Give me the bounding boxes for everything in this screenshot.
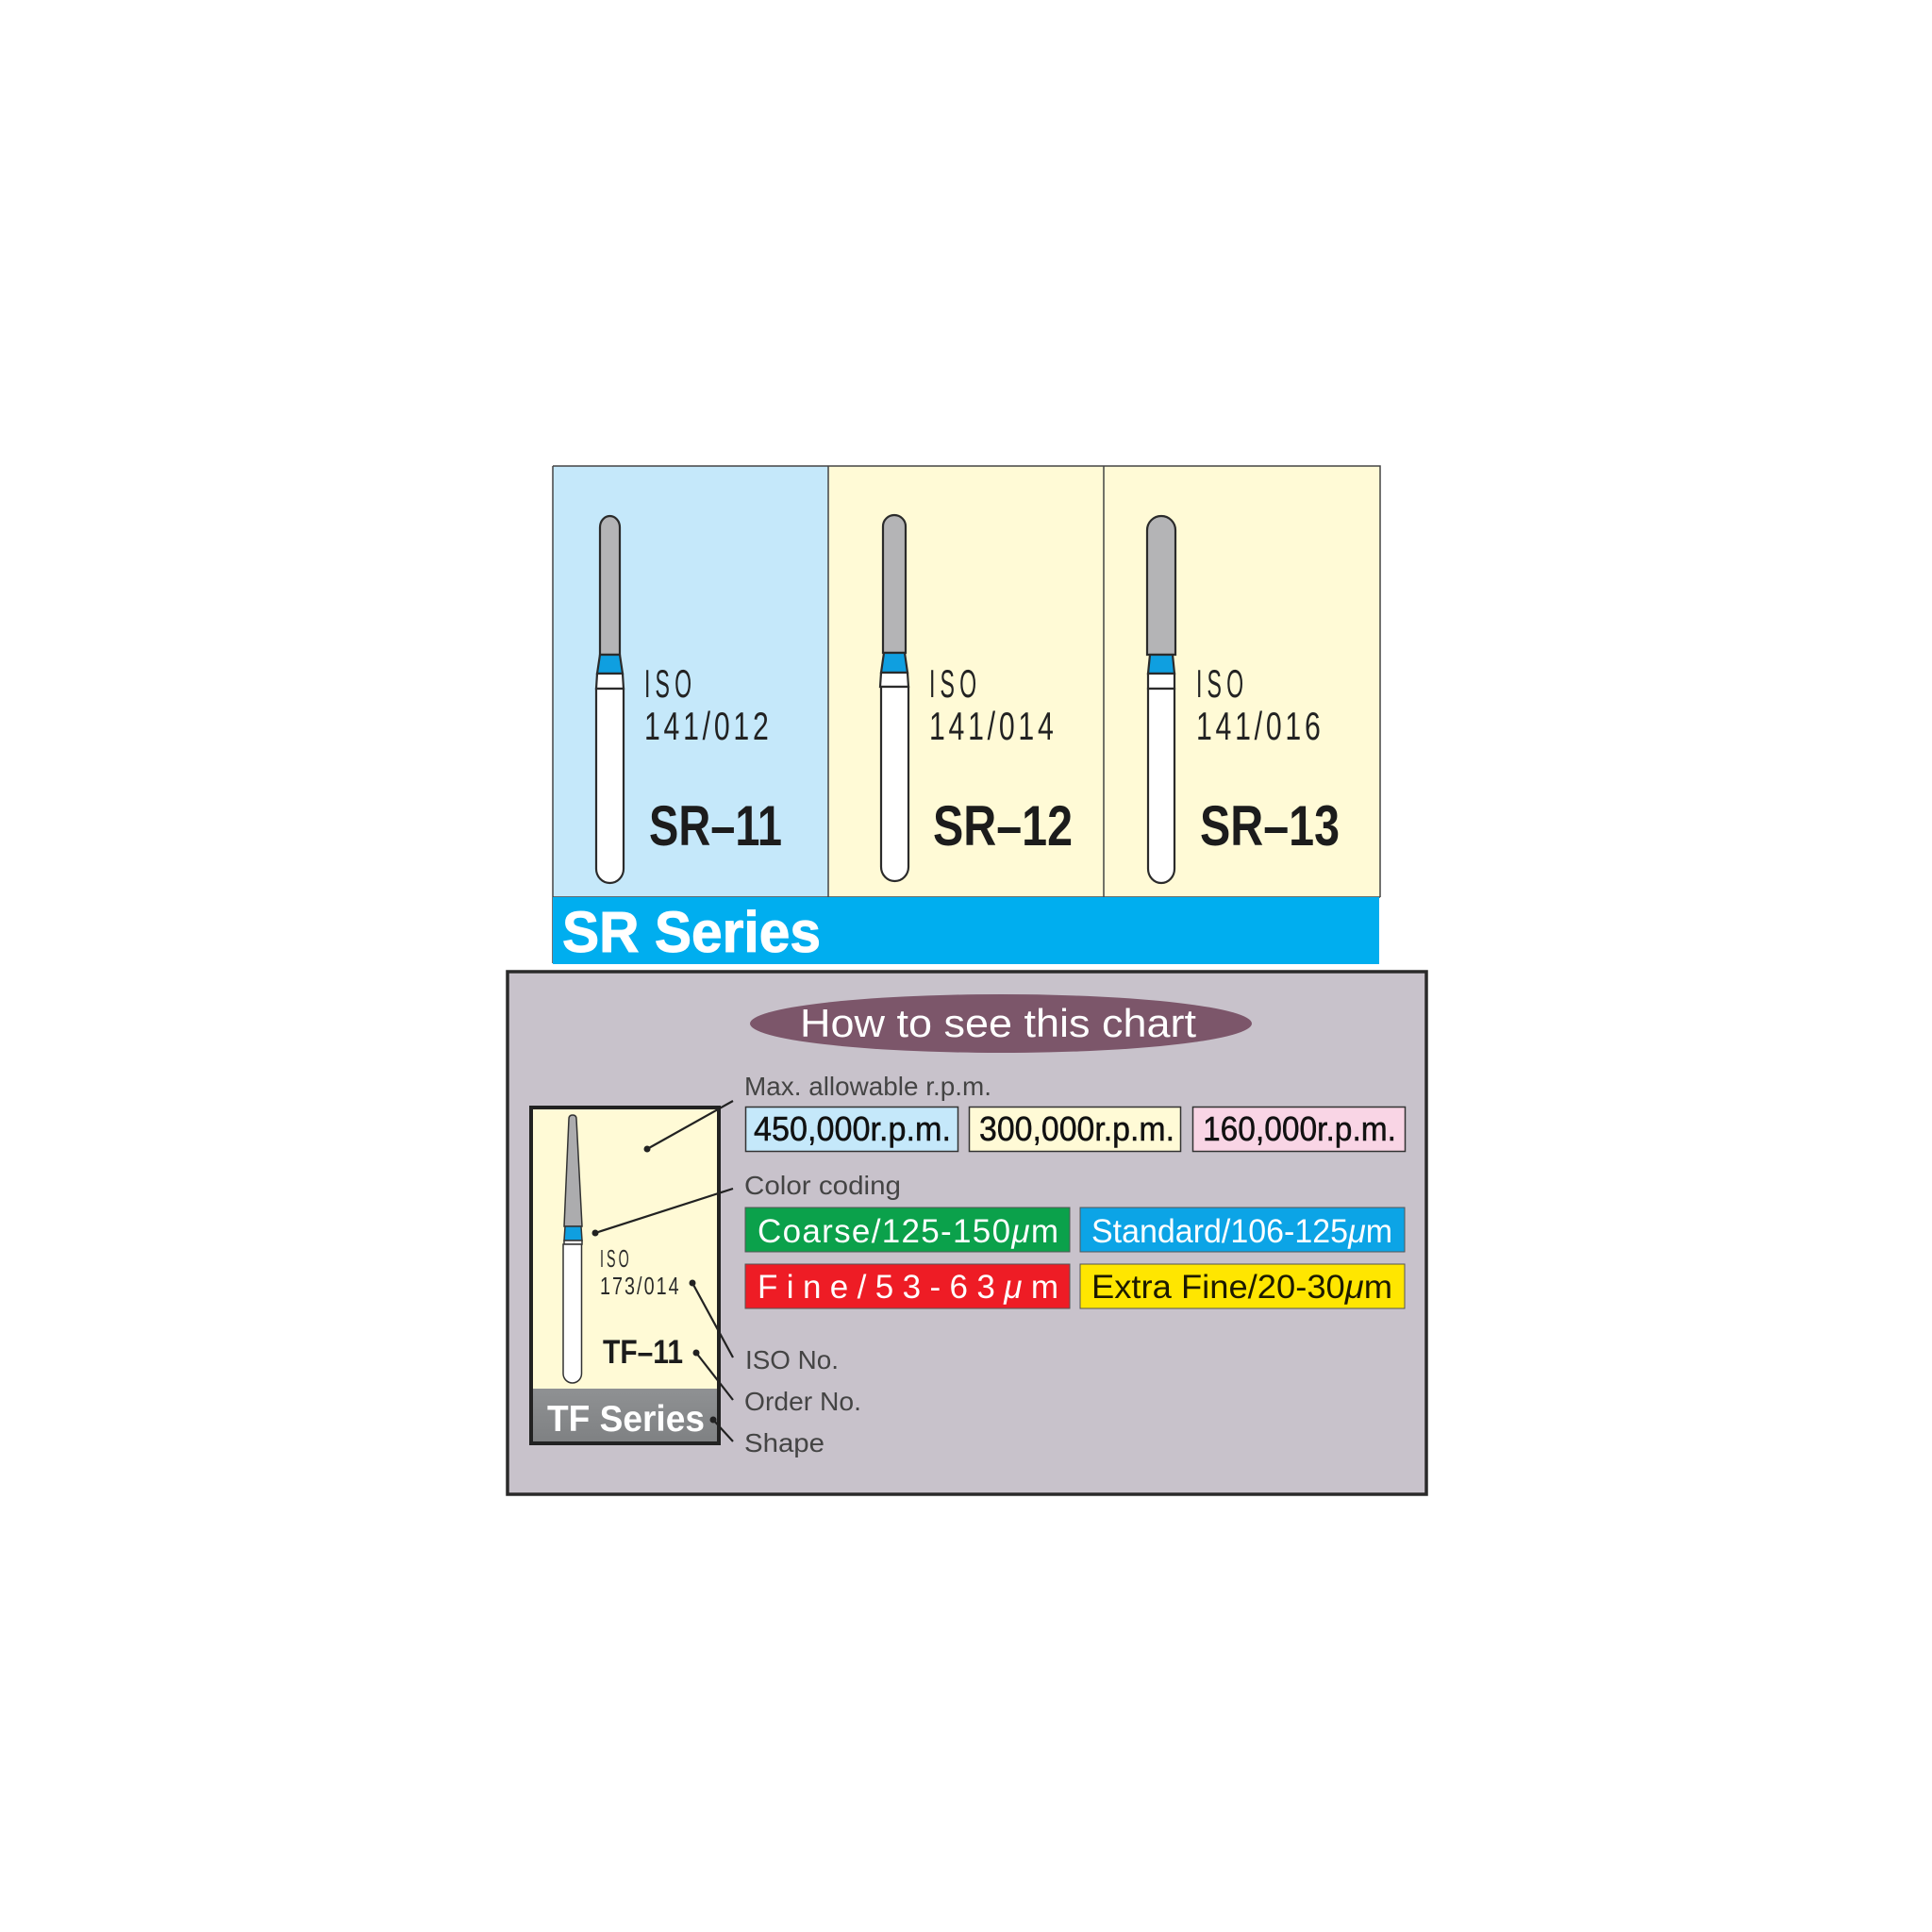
- color coding legend: Fine/53-63 μ m: [758, 1269, 1058, 1306]
- rpm legend: 160,000r.p.m.: [1203, 1109, 1396, 1148]
- panel: how to see this chart: [508, 972, 1426, 1494]
- ISO number: [1196, 662, 1321, 748]
- series bar: [533, 1389, 717, 1441]
- sample card: TF series: [531, 1108, 719, 1443]
- ISO number: [600, 1246, 679, 1300]
- heading: How to see this chart: [800, 1001, 1196, 1045]
- icon: TF-11 bur: [563, 1115, 582, 1383]
- color coding legend: Extra Fine/20-30 μm: [1091, 1269, 1392, 1306]
- cell: SR-12: [828, 466, 1104, 897]
- label: color coding: Color coding: [744, 1171, 901, 1200]
- label: Order No.: Order No.: [744, 1387, 861, 1416]
- ISO number: 173/014: [600, 1272, 679, 1300]
- series title: SR Series: [562, 900, 821, 964]
- color coding legend: [745, 1208, 1405, 1308]
- rpm legend: 300,000r.p.m.: [979, 1109, 1174, 1148]
- label: ISO No.: ISO No.: [745, 1345, 839, 1374]
- callout lines: [592, 1101, 733, 1441]
- label: max rpm: Max. allowable r.p.m.: [744, 1072, 991, 1101]
- ISO number: 141/012: [644, 704, 769, 748]
- ISO number: ISO: [929, 662, 976, 707]
- order number: TF–11: [603, 1334, 683, 1371]
- icon: SR-12 bur: [880, 515, 908, 881]
- order number: SR–11: [649, 794, 782, 858]
- series bar: [553, 897, 1379, 964]
- ISO number: 141/014: [929, 704, 1054, 748]
- ISO number: ISO: [1196, 662, 1243, 707]
- rpm legend: 450,000r.p.m.: [754, 1109, 951, 1148]
- label: Shape: Shape: [744, 1428, 824, 1457]
- panel: SR series chart: [553, 466, 1380, 964]
- icon: SR-11 bur: [596, 516, 624, 883]
- heading: [750, 994, 1252, 1053]
- order number: SR–12: [933, 794, 1073, 858]
- cell: SR-13: [1104, 466, 1380, 897]
- order number: SR–13: [1200, 794, 1340, 858]
- ISO number: ISO: [600, 1246, 629, 1273]
- rpm legend: [745, 1108, 1406, 1151]
- cell: SR-11: [553, 466, 828, 897]
- color coding legend: Coarse/125-150μm: [758, 1213, 1058, 1250]
- ISO number: [644, 662, 769, 748]
- series bar: TF Series: [547, 1399, 705, 1440]
- icon: SR-13 bur: [1147, 516, 1175, 883]
- ISO number: 141/016: [1196, 704, 1321, 748]
- color coding legend: Standard/106-125μm: [1091, 1213, 1392, 1250]
- ISO number: [929, 662, 1054, 748]
- ISO number: ISO: [644, 662, 691, 707]
